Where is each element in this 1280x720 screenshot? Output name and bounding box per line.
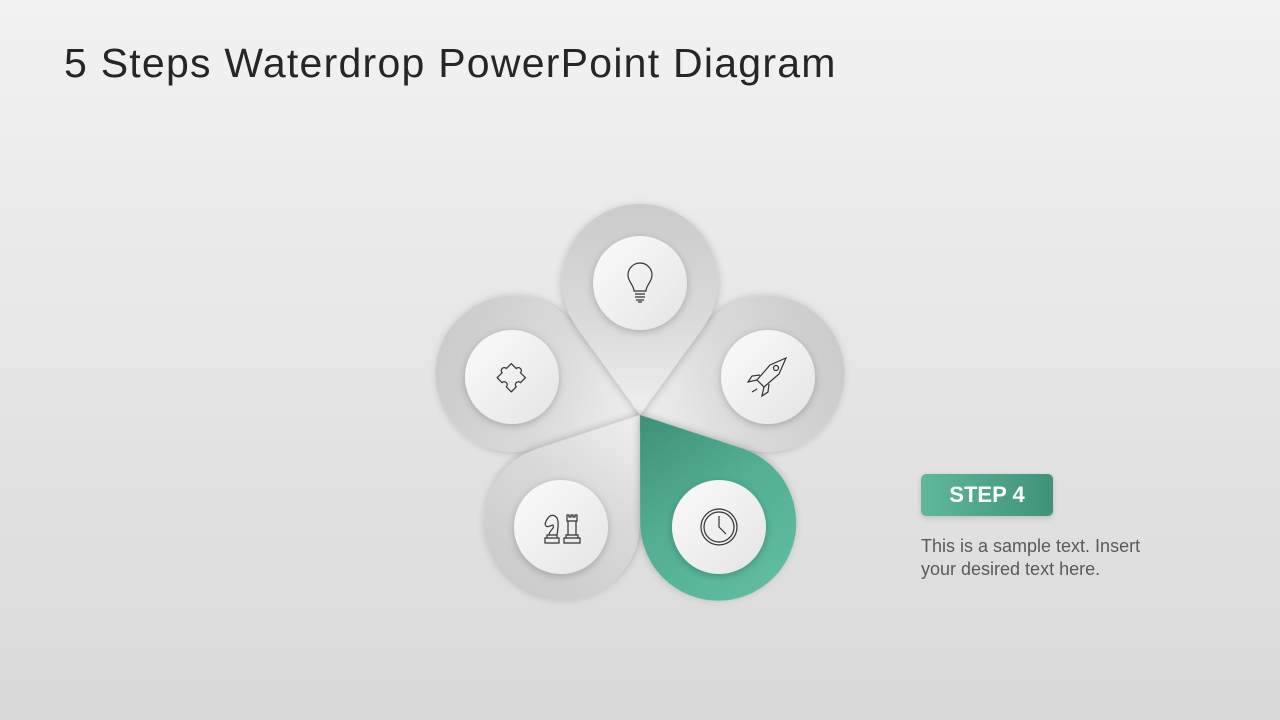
icon: clock xyxy=(701,509,737,545)
step description: your desired text here. xyxy=(921,559,1100,579)
drop: top xyxy=(562,204,718,415)
drop: left xyxy=(415,276,664,489)
icon: chess xyxy=(545,515,580,543)
inner circles xyxy=(465,236,815,574)
step description: This is a sample text. Insert xyxy=(921,536,1140,556)
icon: rocket xyxy=(748,358,786,396)
title: 5 Steps Waterdrop PowerPoint Diagram xyxy=(64,40,837,86)
drop: step 4 green xyxy=(577,369,827,632)
step label xyxy=(921,474,1053,516)
icon: puzzle xyxy=(495,359,528,392)
drop: bottom-left xyxy=(453,369,703,632)
step description xyxy=(921,536,1140,579)
drop: right xyxy=(616,276,865,489)
step label: STEP 4 xyxy=(949,482,1025,507)
icon: lightbulb xyxy=(628,263,652,302)
